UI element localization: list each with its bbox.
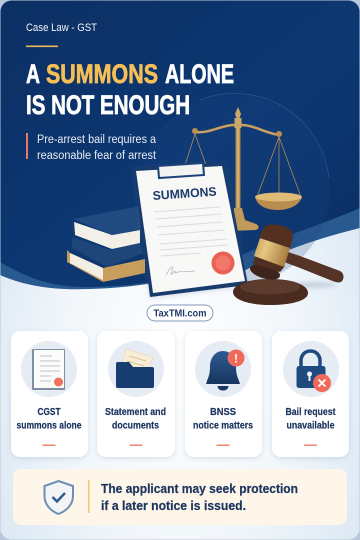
card label xyxy=(16,408,82,429)
card label: unavailable xyxy=(286,420,335,432)
document text lines xyxy=(154,207,228,256)
icon: shield check xyxy=(44,481,73,514)
card label: summons alone xyxy=(16,420,82,432)
title: IS NOT ENOUGH xyxy=(26,90,190,120)
card: CGST summons alone xyxy=(11,331,88,457)
callout xyxy=(13,469,347,525)
subtitle: reasonable fear of arrest xyxy=(37,150,157,162)
clipboard with summons document xyxy=(133,163,248,297)
card label xyxy=(286,407,336,429)
callout text xyxy=(101,483,298,510)
icon: padlock with cross xyxy=(296,351,331,392)
title: ALONE xyxy=(165,59,234,89)
card label: Statement and xyxy=(105,406,166,418)
signature xyxy=(166,267,195,275)
subtitle: Pre-arrest bail requires a xyxy=(37,134,157,146)
summons heading: SUMMONS xyxy=(152,185,217,203)
card label: BNSS xyxy=(210,406,236,418)
card: BNSS notice matters xyxy=(185,331,262,457)
card label: Bail request xyxy=(286,406,336,418)
card label xyxy=(105,407,166,429)
eyebrow label: Case Law - GST xyxy=(26,22,97,34)
clipboard clip xyxy=(158,163,204,178)
subtitle xyxy=(26,133,156,159)
card label xyxy=(194,408,253,429)
gold rule xyxy=(26,46,58,47)
icon: document with seal xyxy=(32,349,65,390)
card label: notice matters xyxy=(193,420,253,432)
icon: stack of books xyxy=(67,206,145,282)
icon: folder xyxy=(116,349,154,388)
title: A xyxy=(26,59,40,89)
card: bail request unavailable xyxy=(272,331,349,457)
brand pill xyxy=(147,305,213,321)
title xyxy=(26,64,234,115)
card: statement and documents xyxy=(97,331,175,457)
callout text: The applicant may seek protection xyxy=(101,481,298,496)
card label: CGST xyxy=(38,406,61,418)
callout text: if a later notice is issued. xyxy=(101,498,246,513)
icon: scales of justice xyxy=(185,107,302,231)
brand pill: TaxTMI.com xyxy=(154,308,206,320)
icon: bell with alert: ! xyxy=(234,352,238,366)
title: SUMMONS xyxy=(46,59,158,89)
icon: gavel xyxy=(233,224,344,305)
wax seal xyxy=(212,252,234,274)
card label: documents xyxy=(112,420,159,432)
